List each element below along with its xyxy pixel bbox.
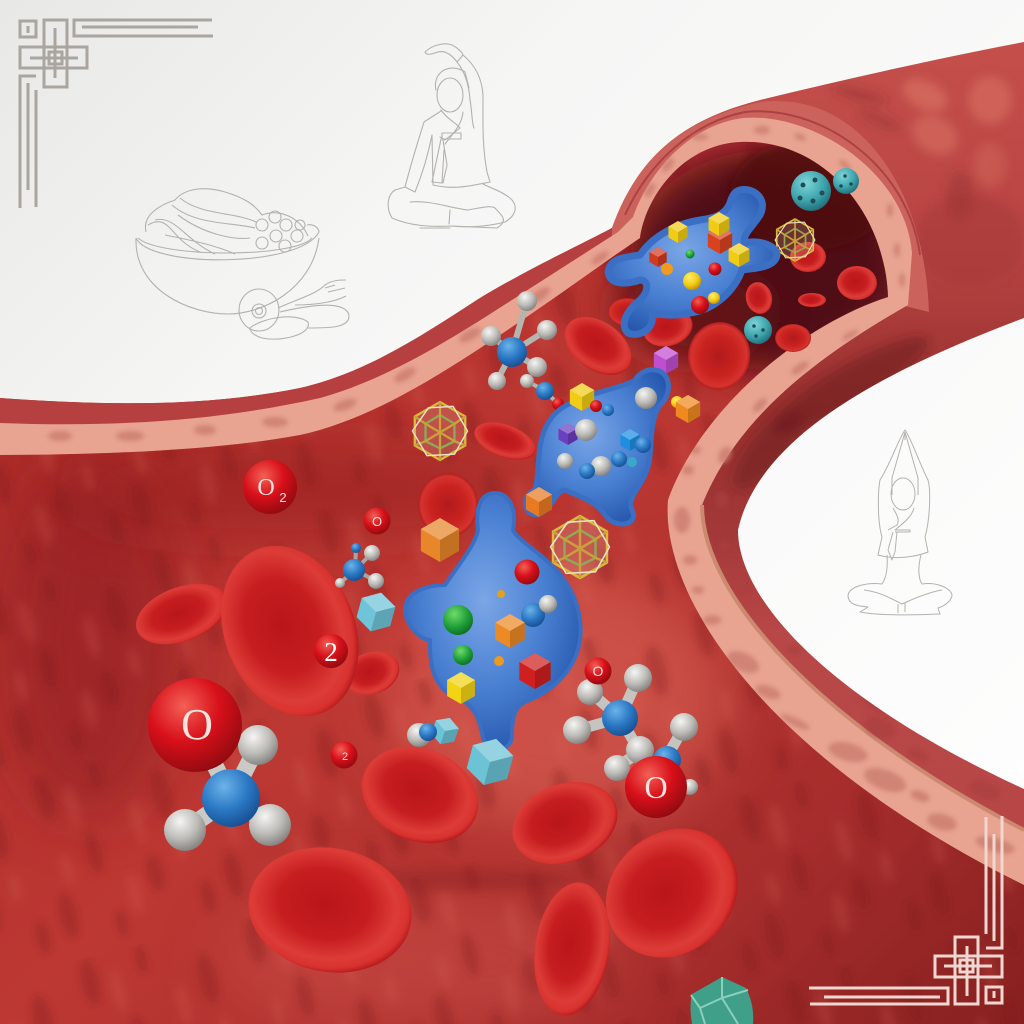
oxygen small 2: 2 [342, 751, 348, 763]
oxygen label 2 on cell [314, 634, 348, 668]
icon: corner ornament top left [20, 20, 213, 208]
blue cell middle with payload [525, 370, 668, 524]
oxygen small near molecule [584, 658, 612, 684]
cube cyan left [354, 588, 398, 636]
green gem nanoparticle [690, 977, 753, 1024]
molecule near large cell [335, 543, 384, 589]
red blood cell behind right [339, 644, 405, 702]
cage nanoparticle upper [412, 402, 468, 460]
cage nanoparticle middle [551, 516, 609, 578]
cube orange [671, 395, 700, 423]
blue cell far with payload [608, 190, 777, 334]
oxygen O2 upper: 2 [279, 490, 287, 505]
red blood cell behind left [128, 572, 236, 656]
vessel: dark inner rim line [625, 111, 920, 255]
molecule top [481, 291, 557, 390]
vessel: rim band around the opening [612, 101, 929, 312]
teal nanoparticle spheres [744, 168, 859, 344]
cube orange on cell [526, 487, 552, 517]
red blood cells foreground [238, 730, 764, 1020]
oxygen O2 upper: O [257, 475, 275, 501]
blue cell main with payload [405, 493, 581, 749]
oxygen O2 upper [243, 460, 297, 514]
oxygen label 2 on cell: 2 [324, 637, 338, 667]
oxygen small near molecule: O [593, 663, 604, 679]
cube purple [654, 346, 678, 374]
oxygen small 2 [330, 742, 358, 768]
molecule small [520, 374, 564, 410]
icon: seated figure arms raised line art [848, 430, 952, 615]
cage nanoparticle deep [775, 219, 815, 261]
cube cyan bottom [464, 733, 516, 791]
vessel: outer silhouette [0, 42, 1024, 828]
molecule with oxygen right: O [644, 769, 668, 805]
oxygen small O: O [372, 514, 382, 529]
molecule with cube lower centre [407, 714, 461, 748]
oxygen small O [364, 508, 390, 534]
icon: seated figure stretching line art [388, 44, 515, 228]
icon: corner ornament bottom right [809, 816, 1002, 1004]
deep red blood cells [418, 242, 877, 537]
cube orange large [421, 518, 459, 562]
red blood cell large [197, 525, 383, 737]
icon: kimchi bowl line art [136, 189, 349, 339]
molecule with oxygen right [563, 664, 698, 818]
molecule with oxygen left: O [181, 700, 213, 749]
molecule with oxygen left [148, 678, 291, 851]
